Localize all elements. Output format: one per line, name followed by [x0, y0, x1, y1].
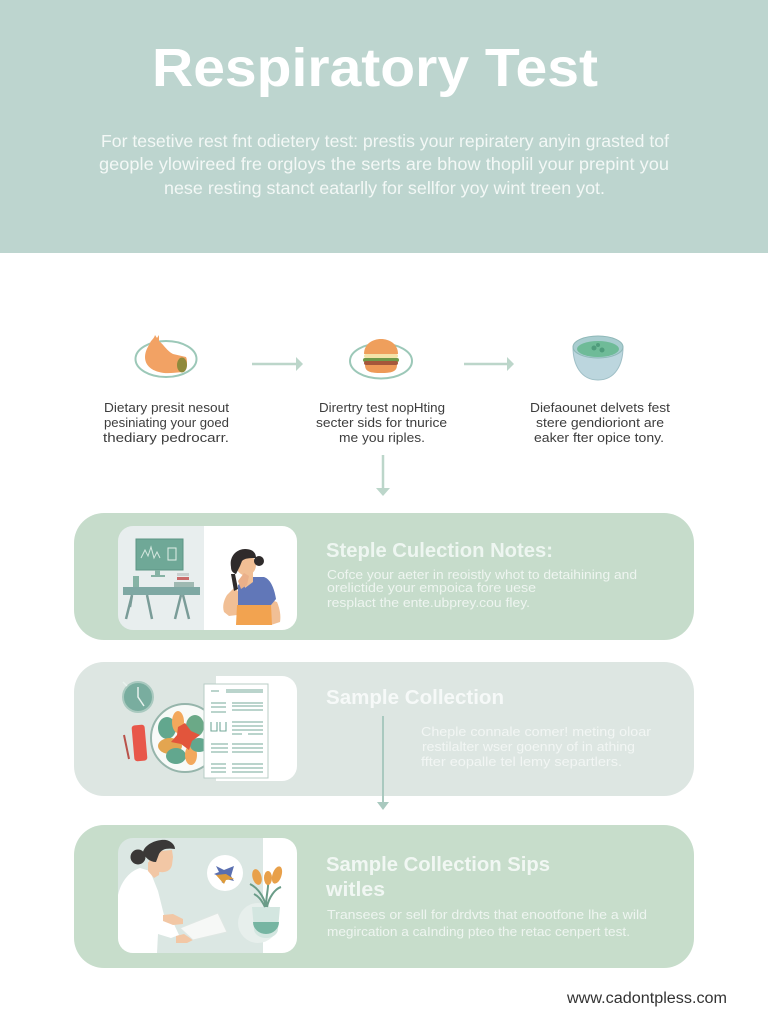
arrow: sample collection to next panel: [377, 716, 389, 810]
icon: chicken on plate: [136, 335, 196, 377]
panel: sample collection: [74, 662, 694, 796]
panel: sample collection sips: [74, 825, 694, 968]
illustration: desk and person: [118, 526, 297, 630]
step 2 caption: Dirertry test nopHting: [319, 400, 445, 415]
step 1 caption: pesiniating your goed: [104, 415, 229, 430]
body text: megircation a caInding pteo the retac cenpert test.: [327, 924, 630, 939]
step 1 caption: [103, 400, 229, 445]
icon: burger on plate: [350, 339, 412, 378]
arrow: step 2 to step 3: [464, 357, 514, 371]
step 3 caption: Diefaounet delvets fest: [530, 400, 670, 415]
panel: steple collection notes: [74, 513, 694, 640]
heading: Steple Culection Notes:: [326, 540, 553, 562]
step 3 caption: stere gendioriont are: [536, 415, 664, 430]
footer url: www.cadontpless.com: [566, 990, 727, 1007]
body text: orelictide your empoica fore uese: [327, 580, 536, 595]
arrow: step 1 to step 2: [252, 357, 303, 371]
body text: Cheple connale comer! meting oloar: [421, 724, 652, 739]
illustration: plate, clock and document: [123, 676, 297, 781]
illustration: clinician with paper and plant: [118, 838, 297, 953]
icon: bowl of green soup: [573, 336, 623, 380]
step 2 caption: secter sids for tnurice: [316, 415, 447, 430]
body text: resplact the ente.ubprey.cou fley.: [327, 595, 530, 610]
body text: [327, 567, 637, 610]
body text: [327, 907, 647, 939]
intro text block: For tesetive rest fnt odietery test: prestis your repiratery anyin grasted tof: [101, 131, 669, 151]
body text: Cofce your aeter in reoistly whot to detaihining and: [327, 567, 637, 582]
title: Respiratory Test: [152, 38, 598, 98]
heading: Sample Collection Sips: [326, 854, 550, 876]
heading: [325, 854, 550, 901]
body text: ffter eopalle tel lemy separtlers.: [421, 754, 622, 769]
intro text block: geople ylowireed fre orgloys the serts are bhow thoplil your prepint you: [99, 154, 669, 174]
intro text block: nese resting stanct eatarlly for sellfor yoy wint treen yot.: [164, 178, 605, 198]
body text: Transees or sell for drdvts that enootfone lhe a wild: [327, 907, 647, 922]
step 2 caption: [316, 400, 447, 445]
step 3 caption: eaker fter opice tony.: [534, 430, 664, 445]
step 3 caption: [530, 400, 670, 445]
header band: [0, 0, 768, 253]
arrow: steps down to panels: [376, 455, 390, 496]
body text: [421, 724, 652, 769]
body text: restilalter wser goenny of in athing: [422, 739, 635, 754]
step 1 caption: thediary pedrocarr.: [103, 430, 229, 445]
heading: Sample Collection: [326, 687, 504, 709]
intro text block: [99, 131, 669, 198]
step 1 caption: Dietary presit nesout: [104, 400, 229, 415]
heading: witles: [325, 879, 385, 901]
step 2 caption: me you riples.: [339, 430, 425, 445]
